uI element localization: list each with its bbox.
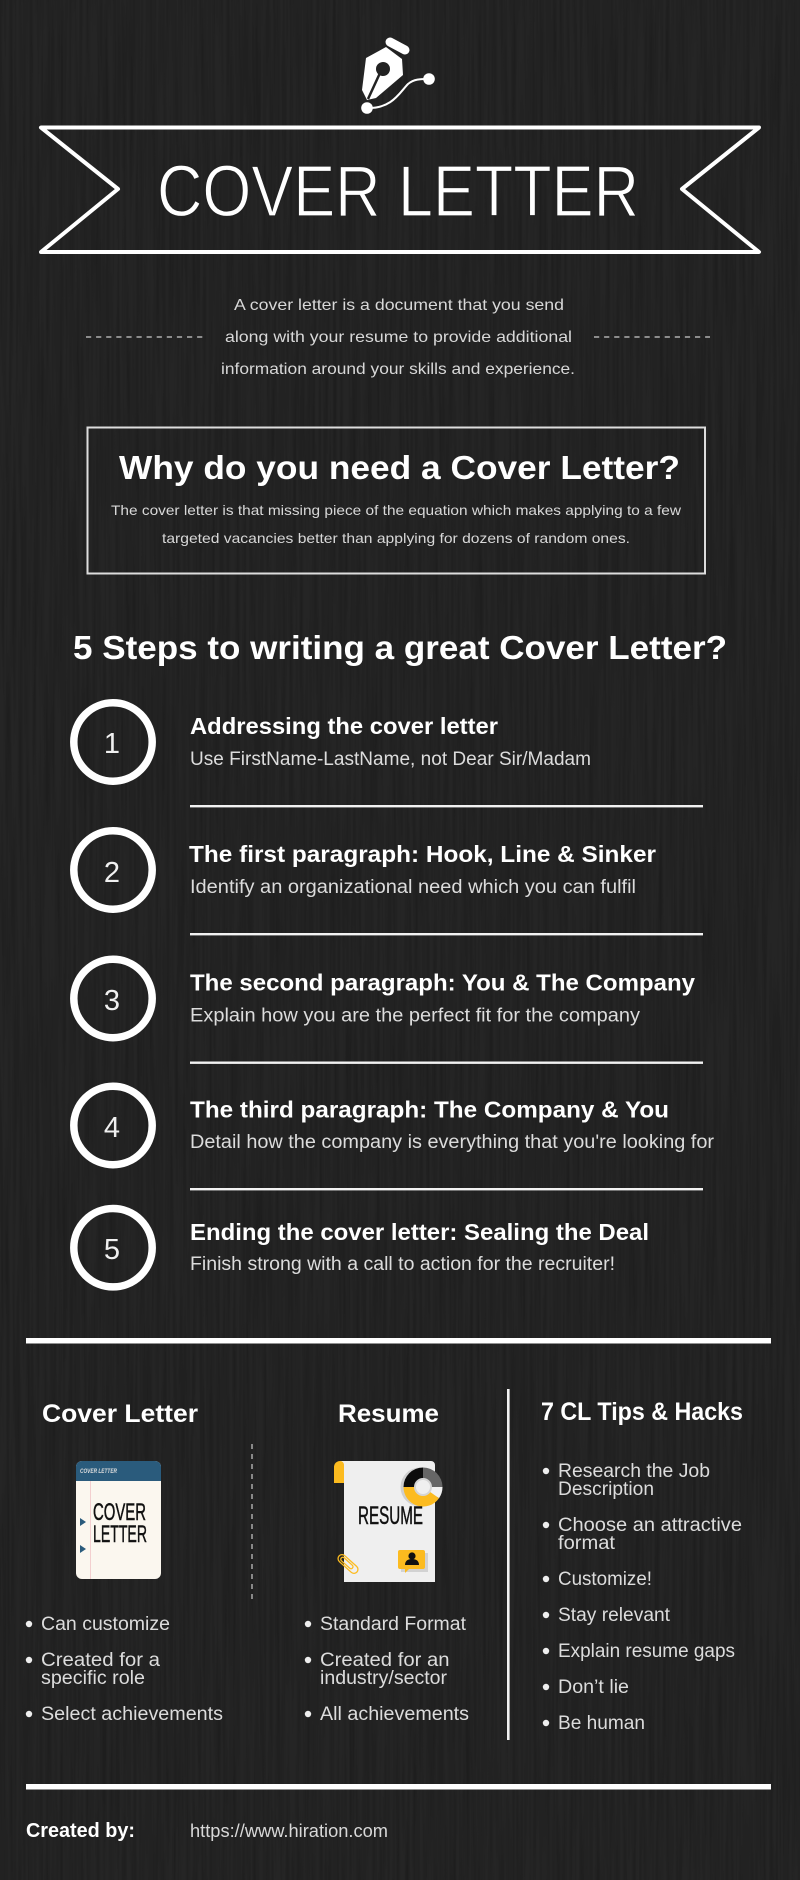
list: resume points [305, 1614, 469, 1725]
panel body text: The cover letter is that missing piece of the equation which makes applying to a few [111, 502, 682, 518]
panel body text [111, 502, 682, 546]
list: tips: Choose an attractive [558, 1515, 742, 1536]
icon: notepad cover letter: LETTER [93, 1521, 147, 1548]
column: cover letter [26, 1400, 223, 1725]
list: tips: Stay relevant [558, 1605, 671, 1626]
step 2: The first paragraph: Hook, Line & Sinker [189, 841, 656, 867]
step 2: 2 [104, 857, 120, 889]
step 1: Addressing the cover letter [190, 713, 498, 739]
step 2: Identify an organizational need which you can fulfil [190, 877, 636, 898]
list: resume points: All achievements [320, 1704, 469, 1725]
step 1: Use FirstName-LastName, not Dear Sir/Madam [190, 749, 591, 770]
list: resume points: Standard Format [320, 1614, 467, 1635]
step 2 [74, 831, 656, 909]
icon: notepad cover letter: COVER [93, 1499, 146, 1526]
step 4: 4 [104, 1112, 120, 1144]
panel body text: targeted vacancies better than applying for dozens of random ones. [162, 530, 630, 546]
icon: notepad cover letter: COVER LETTER [80, 1468, 117, 1475]
step 1: 1 [104, 728, 120, 760]
heading: resume: Resume [338, 1400, 439, 1428]
step 3: Explain how you are the perfect fit for the company [190, 1006, 641, 1026]
list: tips: Be human [558, 1713, 645, 1734]
column: 7 CL tips and hacks [541, 1398, 743, 1734]
title: COVER LETTER [157, 152, 639, 232]
step 1 [74, 703, 591, 781]
footer credit: https://www.hiration.com [190, 1821, 388, 1841]
intro text [221, 297, 575, 378]
step 3: The second paragraph: You & The Company [190, 970, 695, 996]
ribbon banner with title [41, 128, 759, 252]
list: cover letter points: Can customize [41, 1614, 170, 1635]
list: cover letter points: Select achievements [41, 1704, 223, 1725]
list: tips: format [558, 1533, 616, 1554]
step 4: Detail how the company is everything that you're looking for [190, 1132, 715, 1153]
list: tips: Customize! [558, 1569, 652, 1590]
intro text: A cover letter is a document that you send [234, 297, 564, 314]
panel: why do you need a cover letter [88, 428, 705, 574]
list: tips: Explain resume gaps [558, 1641, 735, 1662]
list: tips: Description [558, 1479, 654, 1500]
intro text: along with your resume to provide additional [225, 329, 572, 346]
footer credit: Created by: [26, 1820, 135, 1842]
panel heading: Why do you need a Cover Letter? [119, 449, 680, 486]
list: tips: Research the Job [558, 1461, 710, 1482]
heading: tips: 7 CL Tips & Hacks [541, 1398, 743, 1426]
intro text: information around your skills and experience. [221, 361, 575, 378]
footer credit [26, 1820, 388, 1842]
step 5: 5 [104, 1234, 120, 1266]
step 3 [74, 959, 695, 1038]
list: cover letter points: Created for a [41, 1650, 160, 1671]
icon: notepad cover letter [76, 1461, 161, 1579]
icon: resume document [334, 1461, 443, 1582]
step 5: Finish strong with a call to action for the recruiter! [190, 1254, 615, 1275]
list: cover letter points [26, 1614, 223, 1725]
step 4: The third paragraph: The Company & You [190, 1096, 669, 1122]
list: resume points: Created for an [320, 1650, 450, 1671]
step 4 [74, 1086, 715, 1165]
step 5: Ending the cover letter: Sealing the Deal [190, 1219, 649, 1245]
heading: cover letter: Cover Letter [42, 1400, 198, 1428]
icon: fountain pen nib with bezier curve [361, 42, 435, 114]
step 5 [74, 1208, 649, 1287]
icon: resume document: RESUME [358, 1502, 423, 1530]
list: cover letter points: specific role [41, 1668, 145, 1689]
list: tips: Don’t lie [558, 1677, 629, 1698]
list: resume points: industry/sector [320, 1668, 448, 1689]
list: tips [543, 1461, 742, 1734]
column: resume [305, 1400, 469, 1725]
step 3: 3 [104, 985, 120, 1017]
heading: 5 steps: 5 Steps to writing a great Cover Letter? [73, 629, 727, 666]
